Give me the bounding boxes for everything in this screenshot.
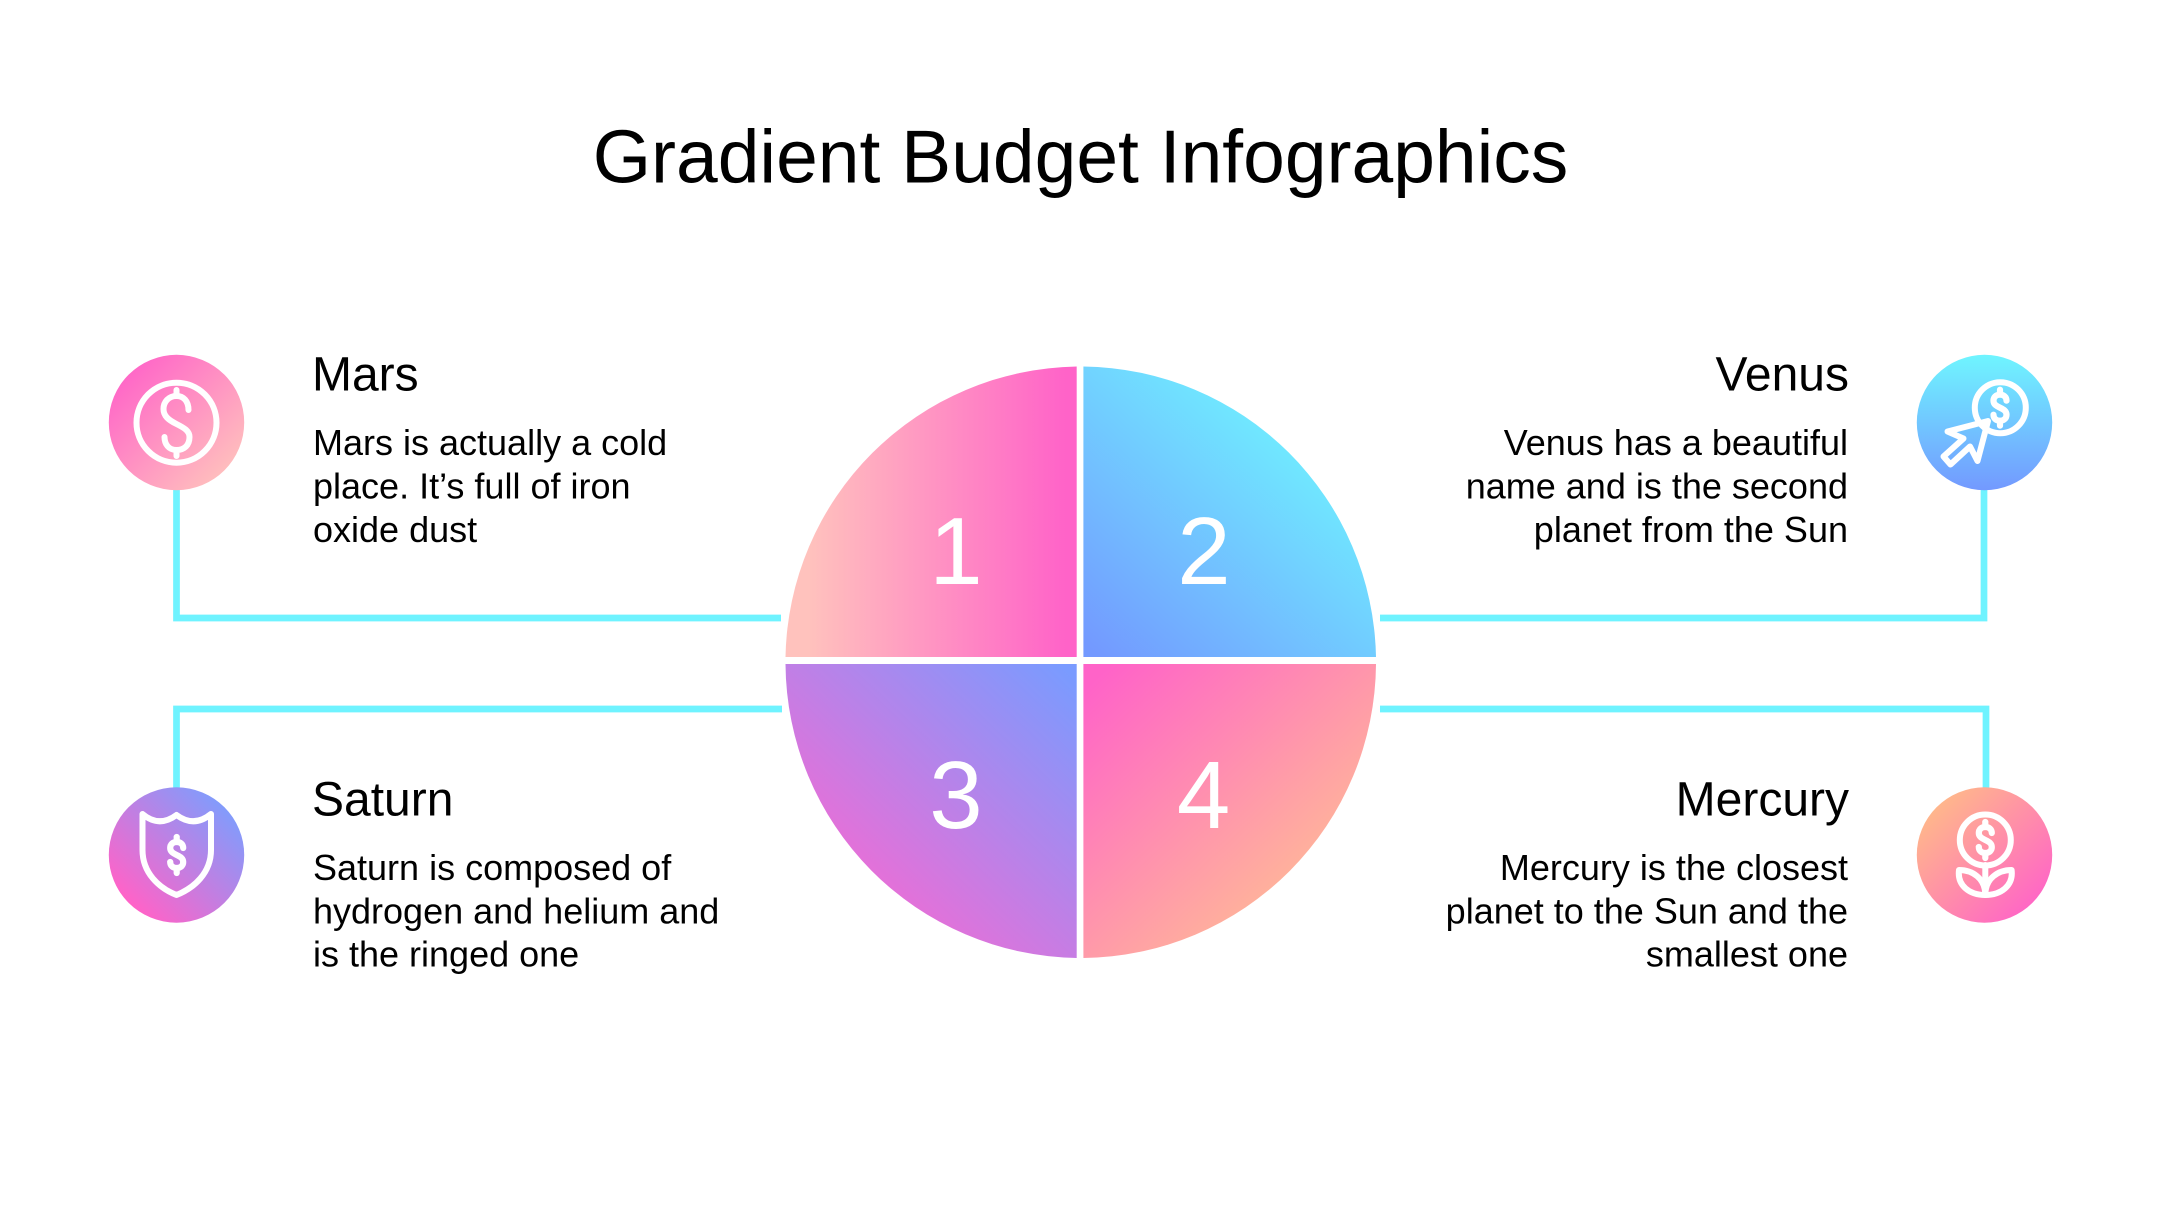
quadrant 1: 1: [929, 498, 983, 605]
quadrant 3: [786, 664, 1077, 958]
body: Saturn: is the ringed one: [313, 933, 579, 974]
icon: cursor clicking coin (Venus): [1917, 355, 2052, 490]
quadrant 2: [1083, 366, 1376, 657]
text block: Saturn: [312, 774, 719, 974]
icon: dollar coin (Mars): [109, 355, 244, 490]
body: Mars: Mars is actually a cold: [313, 422, 667, 463]
heading: Mercury: Mercury: [1676, 774, 1849, 826]
body: Mercury: Mercury is the closest: [1500, 847, 1848, 888]
quadrant 2: 2: [1177, 498, 1231, 605]
text block: Mercury: [1446, 774, 1849, 974]
connector: Mercury: [1380, 709, 1986, 790]
connector: Venus: [1380, 488, 1984, 618]
text block: Venus: [1466, 348, 1849, 550]
heading: Mars: Mars: [312, 348, 419, 402]
body: Mercury: planet to the Sun and the: [1446, 890, 1848, 931]
body: Mars: oxide dust: [313, 509, 477, 550]
body: Venus: planet from the Sun: [1534, 509, 1848, 550]
quadrant 4: 4: [1177, 742, 1230, 849]
heading: Venus: Venus: [1716, 348, 1849, 402]
quadrant 4: [1083, 664, 1376, 958]
body: Mercury: smallest one: [1646, 933, 1848, 974]
icon: dollar shield (Saturn): [109, 787, 244, 923]
body: Saturn: Saturn is composed of: [313, 847, 672, 888]
connector: Mars: [176, 488, 781, 618]
body: Saturn: hydrogen and helium and: [313, 890, 719, 931]
body: Mars: place. It’s full of iron: [313, 465, 630, 506]
body: Venus: name and is the second: [1466, 465, 1848, 506]
quadrant 3: 3: [929, 742, 983, 849]
icon: money plant (Mercury): [1917, 787, 2052, 923]
title: Gradient Budget Infographics: [593, 114, 1568, 198]
body: Venus: Venus has a beautiful: [1504, 422, 1848, 463]
connector: Saturn: [176, 709, 782, 790]
heading: Saturn: Saturn: [312, 774, 453, 826]
text block: Mars: [312, 348, 667, 550]
quadrant 1: [786, 366, 1077, 657]
pie chart: [786, 366, 1376, 958]
